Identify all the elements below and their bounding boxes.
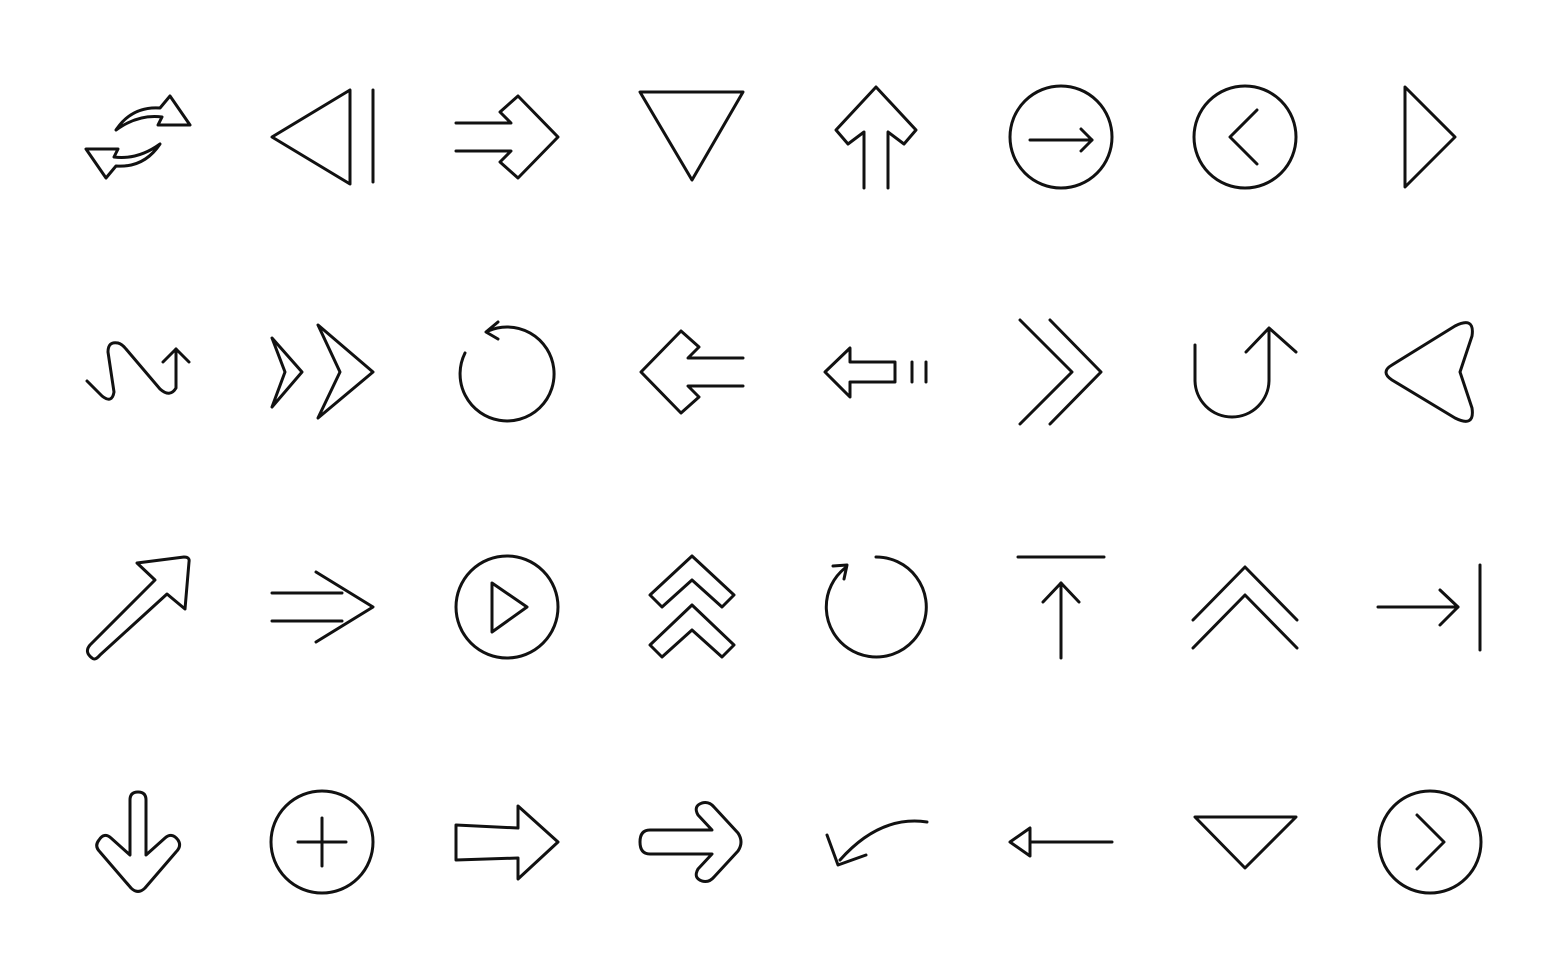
icon: rotate arrow clockwise — [826, 557, 926, 657]
icon: down triangle flat — [1195, 817, 1296, 868]
icon: circle plus — [271, 791, 373, 893]
icon: double line arrow left — [641, 331, 743, 413]
icon: block arrow right — [456, 806, 558, 879]
icon: arrow right to bar — [1378, 565, 1480, 650]
icon: zigzag arrow up — [87, 343, 189, 399]
icon: right triangle — [1405, 87, 1455, 187]
icon: circle arrow right — [1010, 86, 1112, 188]
icon: arrow left — [1010, 828, 1112, 856]
icon: curved arrow left — [827, 821, 927, 865]
icon: double chevron right — [1020, 320, 1101, 424]
icon: double line arrow right open — [272, 572, 373, 642]
icon: rotate arrow — [460, 322, 554, 421]
icon: down triangle — [640, 92, 743, 180]
icon: diagonal arrow up right — [87, 557, 189, 659]
icon: down arrow rounded — [97, 792, 180, 892]
icon: double line arrow right — [456, 96, 558, 178]
icon: u-turn arrow — [1195, 328, 1296, 417]
icon: double chevron up — [1193, 567, 1297, 648]
icon: double chevron up outlined — [650, 556, 734, 657]
icon: skip back triangle — [272, 90, 373, 184]
icon: circle play — [456, 556, 558, 658]
icon: circle chevron left — [1194, 86, 1296, 188]
icon: double triangles right — [272, 325, 373, 418]
icon: rounded triangle left — [1386, 323, 1472, 421]
icon: circle chevron right — [1379, 791, 1481, 893]
icon: refresh arrows — [86, 96, 190, 178]
icon: arrow up to top — [1018, 557, 1104, 658]
icon: rounded arrow right — [640, 802, 741, 882]
icon: up arrow double stem — [836, 87, 916, 188]
icon: outlined arrow left with bars — [825, 348, 926, 397]
